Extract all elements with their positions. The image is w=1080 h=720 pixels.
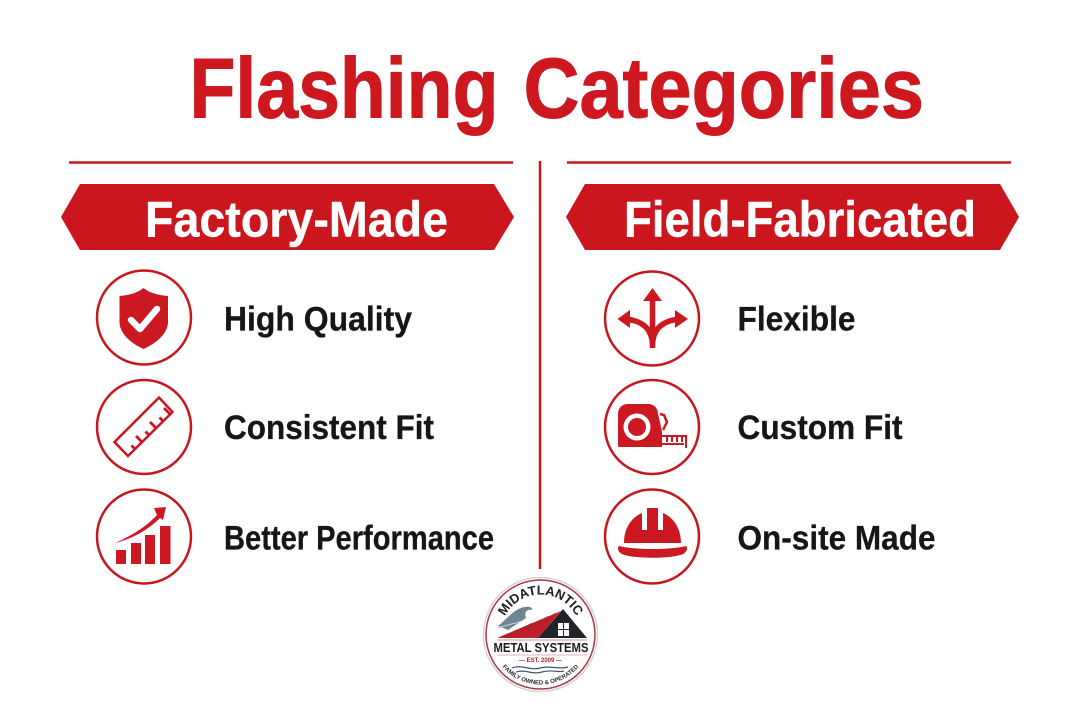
- banner: factory-made: Factory-Made: [145, 192, 448, 248]
- item: better performance: Better Performance: [224, 520, 494, 558]
- title: Categories: [524, 42, 924, 136]
- title: [190, 42, 924, 136]
- icon: rising bar chart: [115, 507, 170, 564]
- logo: tagline: FAMILY OWNED & OPERATED: [502, 664, 578, 684]
- item: custom fit: [605, 380, 903, 474]
- icon: three-way arrows: [618, 288, 688, 348]
- banner: factory-made: [61, 184, 514, 250]
- logo: window: [558, 623, 569, 636]
- logo: water waves: [512, 667, 568, 673]
- item: custom fit: Custom Fit: [738, 409, 903, 447]
- icon: hard hat: [618, 508, 687, 558]
- item: high quality: High Quality: [224, 300, 412, 338]
- logo: wave: [498, 607, 532, 630]
- item: consistent fit: [97, 380, 434, 474]
- item: better performance: [97, 490, 494, 584]
- icon: ruler: [114, 398, 172, 456]
- logo: house gable: [538, 609, 587, 638]
- item: high quality: [97, 270, 412, 364]
- logo: Midatlantic Metal Systems: [482, 576, 598, 692]
- item: flexible: [605, 272, 856, 366]
- icon: shield with check: [120, 288, 168, 349]
- logo: red roof: [497, 611, 561, 638]
- item: on-site made: On-site Made: [738, 520, 936, 558]
- panel: factory-made: [61, 184, 514, 584]
- logo: curved name: MIDATLANTIC: [498, 586, 582, 616]
- logo: established date: — EST. 2009 —: [519, 658, 562, 664]
- icon: tape measure: [618, 404, 686, 448]
- panel: field-fabricated: [566, 184, 1019, 584]
- banner: field-fabricated: Field-Fabricated: [624, 192, 976, 248]
- item: flexible: Flexible: [738, 300, 856, 338]
- item: consistent fit: Consistent Fit: [224, 409, 434, 447]
- title: Flashing: [190, 42, 498, 136]
- logo: metal systems: METAL SYSTEMS: [494, 640, 589, 655]
- item: on-site made: [605, 490, 936, 584]
